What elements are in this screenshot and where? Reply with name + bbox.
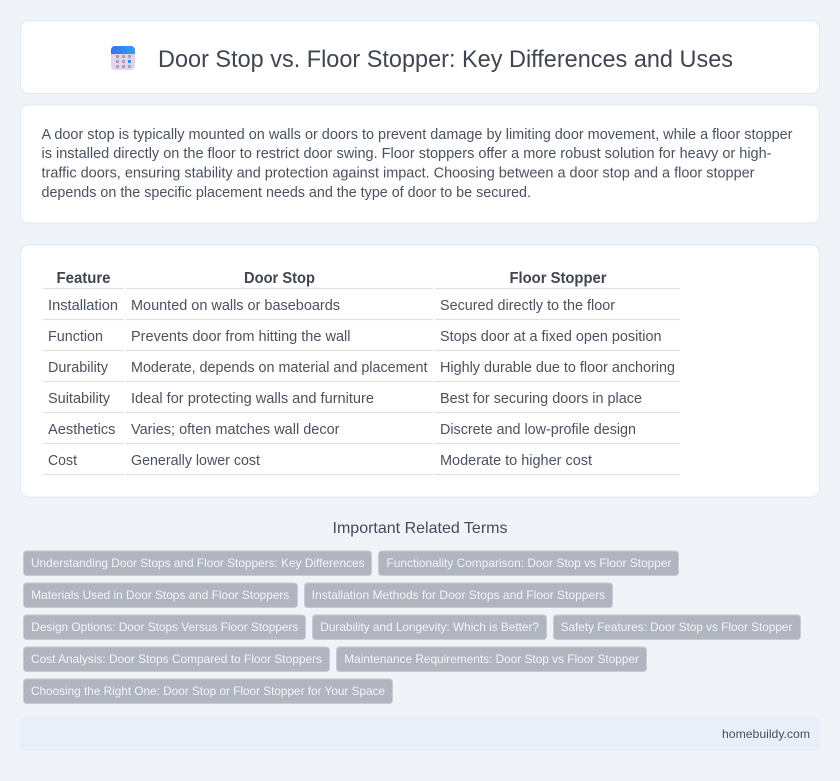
table row: aesthetics: Varies; often matches wall decor (131, 422, 340, 438)
table header row: Door Stop (244, 270, 315, 287)
table row: cost: Cost (48, 453, 77, 469)
table row: durability (43, 360, 680, 382)
table row: durability: Moderate, depends on material and placement (131, 360, 428, 376)
table row: function: Stops door at a fixed open position (440, 329, 662, 345)
heading: important related terms: Important Related Terms (332, 520, 508, 537)
tag (336, 647, 646, 672)
table row: function (43, 329, 680, 350)
footer (20, 717, 820, 751)
tag: Durability and Longevity: Which is Better? (320, 620, 539, 634)
table row: installation: Installation (48, 298, 118, 314)
table header row: Feature (56, 270, 111, 287)
panel: related term tags (24, 551, 800, 704)
text block: introduction: A door stop is typically mounted on walls or doors to prevent damage by limiting door movement, while a floor stopper (42, 127, 793, 143)
text block: introduction: traffic doors, ensuring stability and protection against impact. Choosing between a door stop and a floor stopper (42, 166, 755, 182)
table row: cost: Generally lower cost (131, 453, 260, 469)
table row: durability: Highly durable due to floor anchoring (440, 360, 675, 376)
tag: Installation Methods for Door Stops and Floor Stoppers (312, 588, 605, 602)
panel: header (20, 20, 820, 94)
tag: Safety Features: Door Stop vs Floor Stopper (561, 620, 792, 634)
tag (24, 615, 306, 640)
tag (24, 647, 330, 672)
tag (378, 551, 678, 576)
table row: installation (43, 298, 680, 320)
table row: cost: Moderate to higher cost (440, 453, 592, 469)
table row: durability: Durability (48, 360, 109, 376)
table row: suitability: Best for securing doors in place (440, 391, 642, 407)
table row: function: Prevents door from hitting the wall (131, 329, 350, 345)
title: Door Stop vs. Floor Stopper: Key Differences and Uses (158, 46, 733, 73)
tag (554, 615, 800, 640)
tag: Choosing the Right One: Door Stop or Floor Stopper for Your Space (31, 684, 385, 698)
tag: Maintenance Requirements: Door Stop vs Floor Stopper (344, 652, 639, 666)
footer: homebuildy.com (722, 727, 810, 741)
table header row (43, 270, 680, 288)
table row: suitability: Ideal for protecting walls and furniture (131, 391, 374, 407)
text block: introduction: is installed directly on the floor to restrict door swing. Floor stoppers offer a more robust solution for heavy or high- (42, 146, 772, 162)
tag: Design Options: Door Stops Versus Floor Stoppers (31, 620, 298, 634)
table row: aesthetics (43, 422, 680, 444)
table row: function: Function (48, 329, 103, 345)
tag (304, 583, 612, 608)
table row: suitability (43, 391, 680, 412)
table row: cost (43, 453, 680, 474)
text block: introduction (42, 127, 793, 201)
text block: introduction: depends on the specific placement needs and the type of door to be secured. (42, 185, 531, 201)
table row: installation: Secured directly to the floor (440, 298, 615, 314)
tag: Materials Used in Door Stops and Floor Stoppers (31, 588, 289, 602)
table row: aesthetics: Aesthetics (48, 422, 116, 438)
tag: Functionality Comparison: Door Stop vs Floor Stopper (386, 556, 672, 570)
table row: aesthetics: Discrete and low-profile design (440, 422, 636, 438)
table row: suitability: Suitability (48, 391, 111, 407)
panel: comparison table (20, 245, 820, 497)
tag (24, 583, 298, 608)
table header row: Floor Stopper (510, 270, 606, 287)
table row: installation: Mounted on walls or baseboards (131, 298, 340, 314)
icon: calendar (111, 46, 135, 70)
tag: Understanding Door Stops and Floor Stoppers: Key Differences (31, 556, 364, 570)
tag (312, 615, 546, 640)
panel: introduction (20, 105, 820, 223)
tag (24, 551, 372, 576)
tag (24, 679, 392, 704)
tag: Cost Analysis: Door Stops Compared to Floor Stoppers (31, 652, 322, 666)
